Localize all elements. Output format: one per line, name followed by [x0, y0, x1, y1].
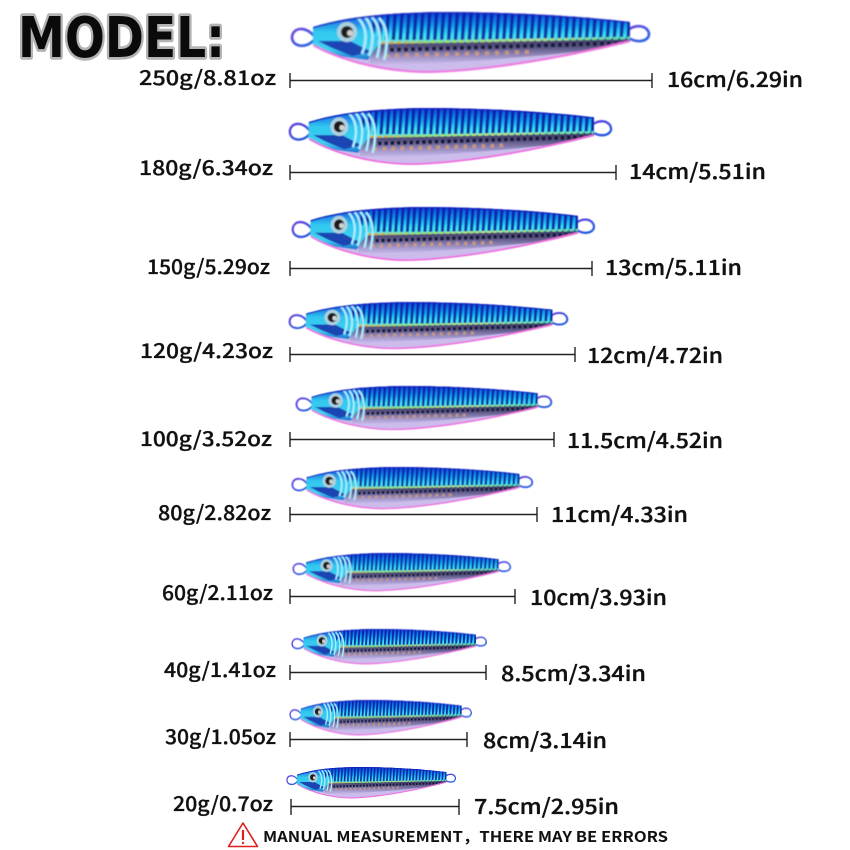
lure illustration 30g — [290, 697, 471, 739]
lure illustration 20g — [287, 764, 455, 802]
length label 13cm: 13cm/5.11in — [605, 252, 742, 282]
weight label 20g: 20g/0.7oz — [173, 788, 273, 817]
measure line 14cm — [290, 165, 616, 180]
row: 100g lure — [296, 382, 551, 435]
measure line 10cm — [290, 589, 515, 604]
icon: warning triangle — [228, 823, 258, 846]
row: 150g lure — [293, 203, 594, 266]
row: 180g lure — [290, 103, 611, 171]
lure illustration 80g — [292, 464, 532, 513]
disclaimer note: MANUAL MEASUREMENT，THERE MAY BE ERRORS — [263, 826, 668, 847]
measure line 8cm — [290, 732, 467, 747]
row: 40g lure — [292, 626, 486, 668]
row: 250g lure — [292, 7, 649, 79]
measure line 7.5cm — [291, 799, 459, 815]
weight label 100g: 100g/3.52oz — [140, 423, 272, 452]
lure illustration 150g — [293, 203, 594, 266]
measure line 8.5cm — [290, 665, 486, 680]
weight label 150g: 150g/5.29oz — [147, 251, 270, 280]
lure illustration 60g — [293, 550, 510, 595]
measure line 11cm — [290, 507, 537, 522]
measure line 16cm — [290, 73, 652, 88]
length label 14cm: 14cm/5.51in — [629, 156, 766, 186]
length label 12cm: 12cm/4.72in — [587, 340, 723, 370]
length label 7.5cm: 7.5cm/2.95in — [474, 791, 619, 821]
measure line 13cm — [290, 261, 592, 276]
title: MODEL: MODEL: — [18, 6, 225, 71]
length label 10cm: 10cm/3.93in — [530, 582, 667, 612]
lure illustration 250g — [292, 7, 649, 79]
length label 16cm: 16cm/6.29in — [667, 64, 803, 94]
length label 11.5cm: 11.5cm/4.52in — [567, 425, 723, 455]
row: 80g lure — [292, 464, 532, 513]
measure line 12cm — [290, 347, 575, 362]
weight label 120g: 120g/4.23oz — [140, 335, 273, 364]
length label 8.5cm: 8.5cm/3.34in — [501, 658, 646, 688]
row: 120g lure — [290, 298, 567, 354]
lure illustration 100g — [296, 382, 551, 435]
lure illustration 40g — [292, 626, 486, 668]
length label 11cm: 11cm/4.33in — [551, 499, 688, 529]
weight label 40g: 40g/1.41oz — [164, 654, 276, 683]
measure line 11.5cm — [290, 432, 554, 447]
row: 30g lure — [290, 697, 471, 739]
weight label 80g: 80g/2.82oz — [158, 497, 271, 526]
weight label 250g: 250g/8.81oz — [139, 62, 276, 91]
lure illustration 180g — [290, 103, 611, 171]
weight label 60g: 60g/2.11oz — [162, 577, 273, 606]
weight label 180g: 180g/6.34oz — [139, 152, 273, 181]
row: 60g lure — [293, 550, 510, 595]
length label 8cm: 8cm/3.14in — [483, 725, 607, 755]
row: 20g lure — [287, 764, 455, 802]
weight label 30g: 30g/1.05oz — [165, 721, 276, 750]
lure illustration 120g — [290, 298, 567, 354]
